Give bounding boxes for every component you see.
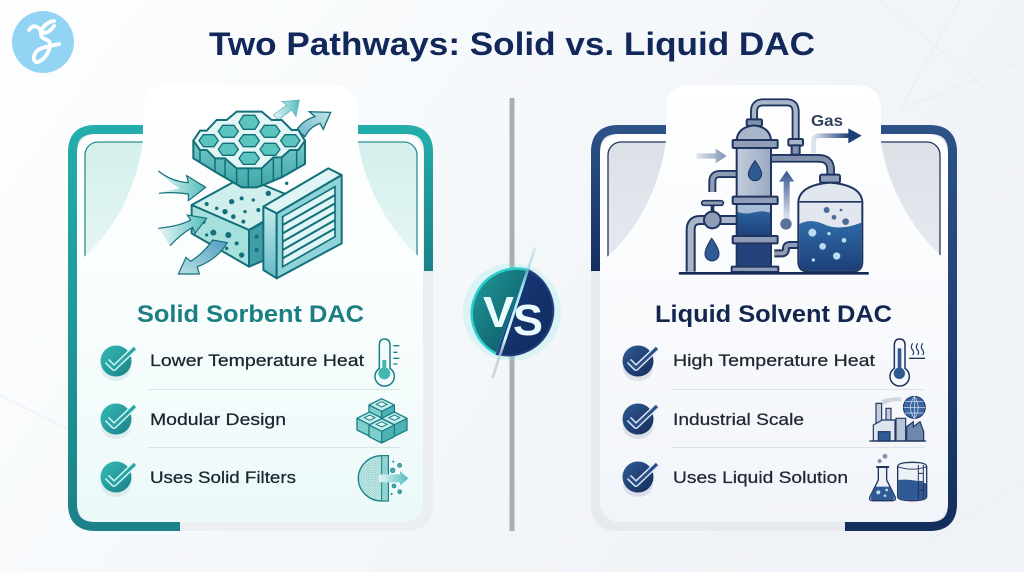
list row: industrial scale: Industrial Scale [673,410,804,429]
honeycomb [193,141,305,187]
flow arrows [697,149,727,163]
list row: modular design: Modular Design [150,410,286,429]
list row: high temperature heat: High Temperature Heat [673,351,875,370]
vs label [483,288,543,345]
ground line [679,272,869,275]
tower [747,119,762,126]
lower connector [774,245,799,253]
panel: solid sorbent DAC [68,85,433,531]
list row: industrial scale [622,389,926,442]
heading: solid sorbent DAC: Solid Sorbent DAC [137,301,364,328]
list row: uses liquid solution [622,447,927,501]
list row: uses solid filters: Uses Solid Filters [150,468,296,487]
list row: high temperature heat [622,339,925,386]
illustration: absorption tower and tank [679,102,869,275]
gas arrow [813,136,849,153]
sorbent block [192,177,300,230]
tank [820,175,840,183]
louver [263,168,342,213]
illustration: honeycomb, sorbent block and louver filter [158,100,342,278]
heading: liquid solvent DAC: Liquid Solvent DAC [655,301,892,328]
vs label: V [483,288,515,337]
list row: uses solid filters [100,447,408,501]
vs label: S [513,296,543,345]
logo [12,11,74,73]
center divider [510,98,514,531]
panel: liquid solvent DAC [591,85,957,531]
vs badge [463,247,561,378]
arrows in [158,171,206,201]
arrows out [273,100,299,120]
list row: lower temperature heat [100,339,399,386]
right pipe [771,158,831,176]
list row: uses liquid solution: Uses Liquid Solution [673,468,848,487]
valve [711,203,714,213]
list row: lower temperature heat: Lower Temperature Heat [150,351,364,370]
gas label: Gas [811,113,843,130]
top pipe [754,102,796,141]
title: Two Pathways: Solid vs. Liquid DAC [209,26,815,62]
left pipes [712,174,737,192]
list row: modular design [100,389,407,443]
